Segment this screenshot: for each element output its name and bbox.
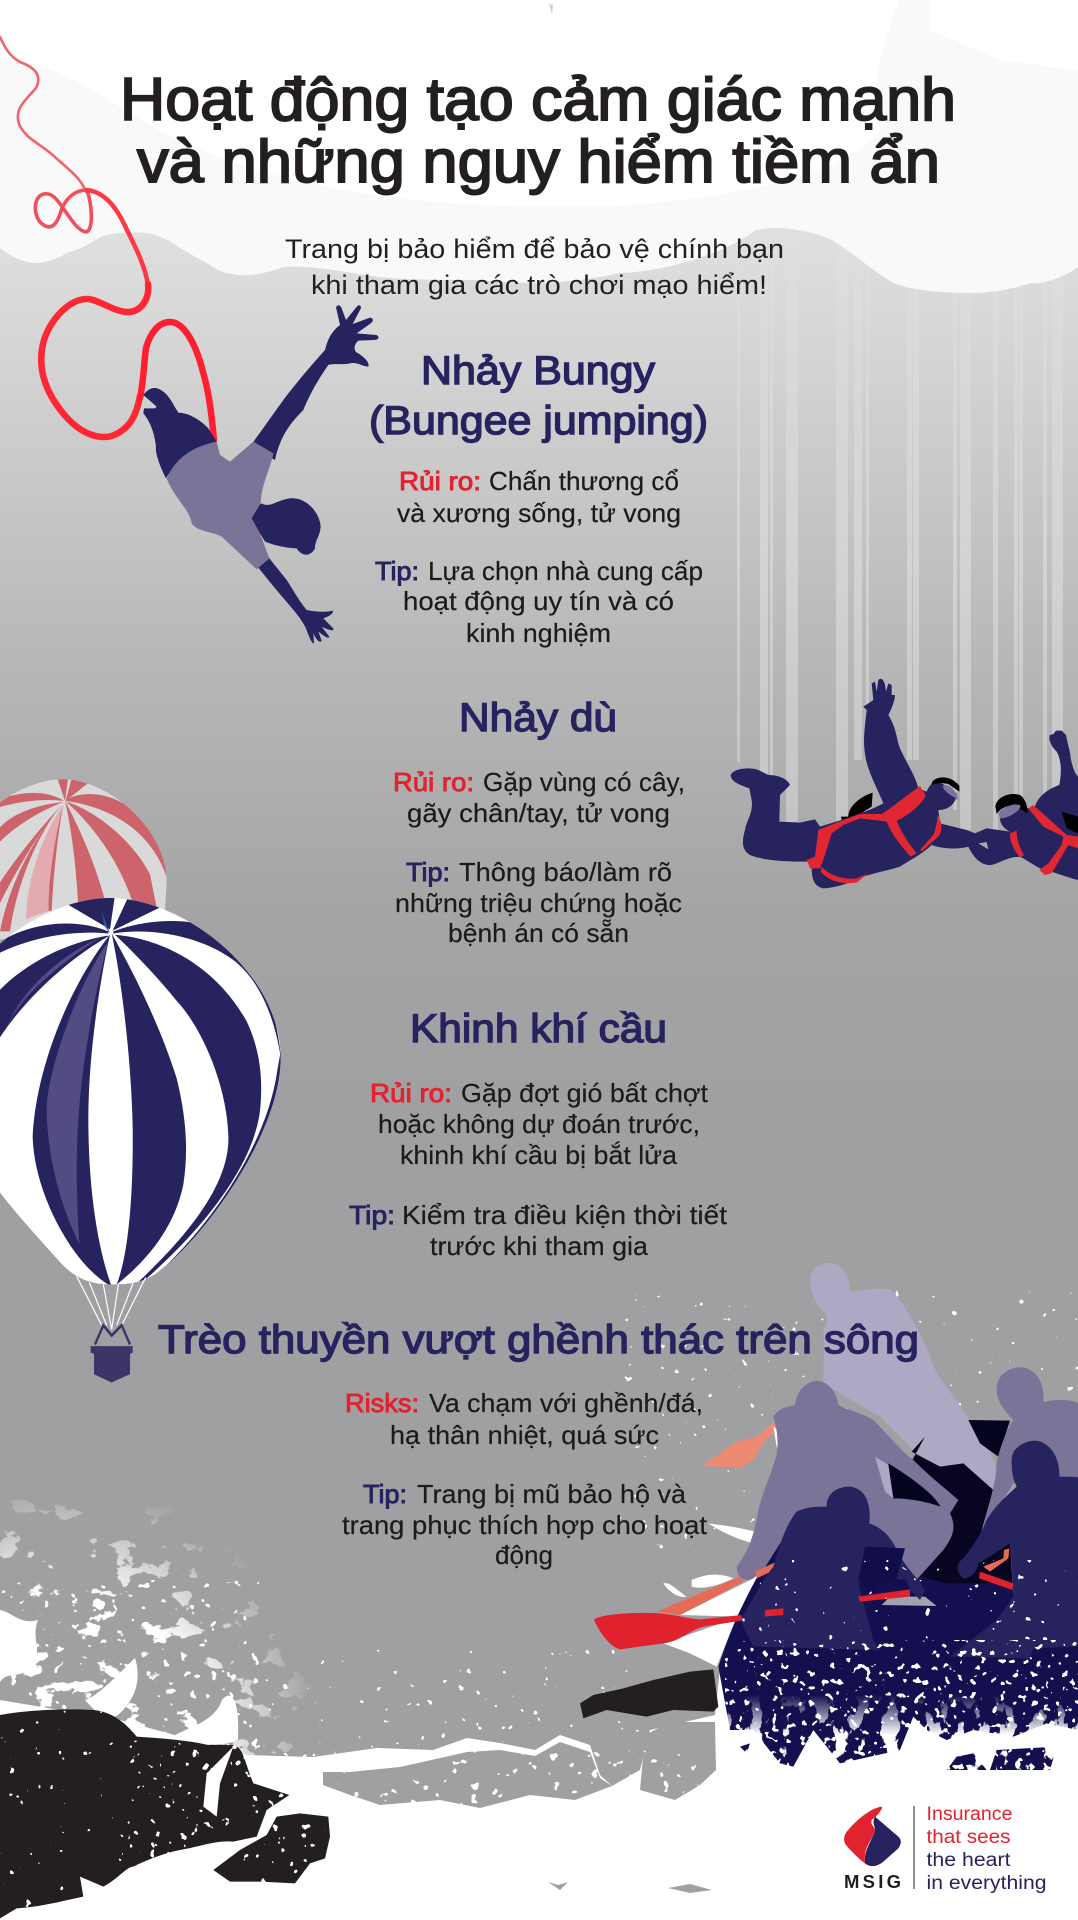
- tip text: trang phục thích hợp cho hoạt: [342, 1510, 708, 1540]
- risk text: khinh khí cầu bị bắt lửa: [400, 1140, 678, 1170]
- raft water specks: [725, 1560, 1078, 1790]
- tip text: [375, 556, 703, 648]
- logo divider: [914, 1806, 915, 1889]
- tip text: hoạt động uy tín và có: [403, 586, 674, 616]
- risk text: Gặp đợt gió bất chợt: [461, 1078, 709, 1108]
- risk text: [393, 767, 685, 828]
- tip text: Kiểm tra điều kiện thời tiết: [402, 1200, 728, 1230]
- tip text: Tip:: [363, 1479, 407, 1509]
- tagline: that sees: [926, 1827, 1010, 1848]
- tip text: Thông báo/làm rõ: [459, 857, 672, 887]
- tip text: Tip:: [349, 1200, 395, 1230]
- heading: Nhảy Bungy: [421, 349, 655, 393]
- risk text: và xương sống, tử vong: [397, 498, 681, 528]
- navy balloon: [0, 891, 287, 1382]
- section: rafting: [158, 1318, 919, 1570]
- MSIG logo: [844, 1804, 1046, 1894]
- navy water patches: [740, 1743, 1057, 1770]
- back paddle: [702, 1423, 782, 1467]
- risk text: gãy chân/tay, tử vong: [407, 798, 670, 828]
- rafter middle: [737, 1381, 958, 1583]
- heading: Nhảy dù: [459, 696, 617, 740]
- white water: [0, 1668, 1078, 1920]
- logo wordmark: MSIG: [844, 1871, 901, 1892]
- risk text: Gặp vùng có cây,: [483, 767, 685, 797]
- cloud: [0, 0, 1078, 293]
- paddle pieces: [765, 1572, 1013, 1617]
- section: hot air balloon: [349, 1007, 728, 1261]
- basket: [91, 1325, 133, 1382]
- tip text: [349, 1200, 728, 1261]
- risk text: Chấn thương cổ: [489, 466, 679, 496]
- front paddle shaft: [657, 1562, 778, 1615]
- tagline: [926, 1804, 1046, 1894]
- risk text: hoặc không dự đoán trước,: [378, 1109, 700, 1139]
- white flecks on gray patches: [323, 1750, 723, 1810]
- rafter front left: [740, 1487, 925, 1650]
- front paddle blade: [594, 1613, 742, 1649]
- water spray: gray area specks: [0, 1290, 1078, 1780]
- skydivers: [731, 679, 1078, 888]
- bungee rope: [0, 37, 214, 440]
- tip text: Tip:: [375, 556, 419, 586]
- tip text: trước khi tham gia: [430, 1231, 649, 1261]
- falling air streaks: [737, 240, 1063, 830]
- risk text: Rủi ro:: [399, 466, 481, 496]
- rafter front right: [950, 1441, 1078, 1658]
- tagline: the heart: [926, 1850, 1011, 1871]
- rafters: [594, 1263, 1078, 1770]
- tip text: Lựa chọn nhà cung cấp: [428, 556, 703, 586]
- risk text: hạ thân nhiệt, quá sức: [390, 1420, 659, 1450]
- title: Hoạt động tạo cảm giác mạnh: [120, 66, 956, 133]
- tagline: Insurance: [926, 1804, 1012, 1825]
- pink balloon: [0, 779, 166, 940]
- section: skydiving: [393, 696, 685, 948]
- rock right: [580, 1669, 718, 1718]
- subtitle: Trang bị bảo hiểm để bảo vệ chính bạn: [285, 234, 784, 264]
- risk text: [397, 466, 681, 528]
- subtitle: [285, 234, 784, 300]
- raft hull: [718, 1540, 1078, 1767]
- logo mark: [844, 1807, 901, 1866]
- tip text: [395, 857, 682, 948]
- gray water patches: [323, 1722, 716, 1893]
- risk text: Risks:: [345, 1388, 419, 1418]
- envelope: [0, 891, 287, 1291]
- balloon ropes: [77, 1276, 146, 1329]
- risk text: Rủi ro:: [370, 1078, 452, 1108]
- tip text: Tip:: [406, 857, 450, 887]
- title: và những nguy hiểm tiềm ẩn: [137, 128, 940, 195]
- risk text: Va chạm với ghềnh/đá,: [429, 1388, 703, 1418]
- subtitle: khi tham gia các trò chơi mạo hiểm!: [311, 270, 767, 300]
- raft interior: [968, 1420, 1010, 1457]
- tip text: Trang bị mũ bảo hộ và: [417, 1479, 687, 1509]
- risk text: Rủi ro:: [393, 767, 474, 797]
- risk text: [370, 1078, 709, 1170]
- rafter back: [810, 1263, 996, 1493]
- white spray beside raft: [663, 1427, 783, 1667]
- tagline: in everything: [926, 1873, 1046, 1894]
- rock left: [0, 1700, 340, 1920]
- rafter back right: [980, 1367, 1078, 1537]
- bungee jumper: [143, 305, 378, 643]
- heading: (Bungee jumping): [369, 399, 708, 443]
- section: bungee jumping: [369, 349, 708, 648]
- risk text: [345, 1388, 703, 1450]
- heading: Trèo thuyền vượt ghềnh thác trên sông: [158, 1318, 919, 1362]
- heading: [369, 349, 708, 443]
- tip text: động: [495, 1540, 553, 1570]
- tip text: những triệu chứng hoặc: [395, 888, 682, 918]
- tip text: [342, 1479, 708, 1570]
- title: [120, 66, 956, 195]
- heading: Khinh khí cầu: [410, 1007, 667, 1051]
- tip text: kinh nghiệm: [466, 618, 611, 648]
- tip text: bệnh án có sẵn: [448, 918, 629, 948]
